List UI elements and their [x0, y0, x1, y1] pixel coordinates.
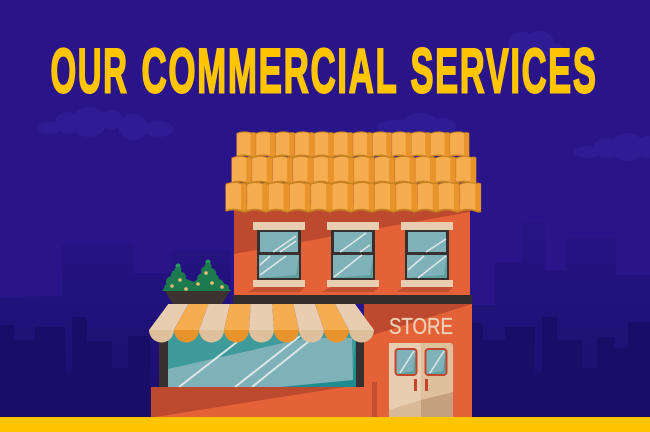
cloud: right — [574, 133, 650, 161]
right store wall — [364, 304, 472, 417]
lower front wall — [151, 382, 377, 417]
store sign: STORE — [389, 313, 453, 339]
window 2 — [322, 222, 379, 292]
door — [389, 343, 453, 417]
planter — [162, 260, 231, 304]
door handles — [414, 379, 428, 391]
title: COMMERCIAL — [142, 36, 398, 106]
cloud: top right — [508, 31, 565, 57]
pot — [165, 291, 230, 304]
cloud: behind roof — [377, 113, 456, 135]
cloud: left — [36, 107, 173, 140]
band under upper wall — [233, 295, 472, 304]
bush — [162, 260, 231, 293]
upper wall — [234, 205, 470, 296]
window 3 — [396, 222, 453, 292]
ground band — [0, 417, 650, 432]
skyline: front layer — [0, 317, 650, 417]
awning — [149, 304, 374, 342]
clouds — [36, 31, 650, 161]
title: OUR — [50, 36, 128, 106]
window 1 — [248, 222, 305, 292]
shop window — [159, 330, 364, 388]
roof tiles — [226, 132, 481, 212]
door window left — [396, 349, 416, 375]
skyline: back layer — [0, 222, 650, 417]
building: store — [149, 132, 481, 417]
door window right — [426, 349, 446, 375]
